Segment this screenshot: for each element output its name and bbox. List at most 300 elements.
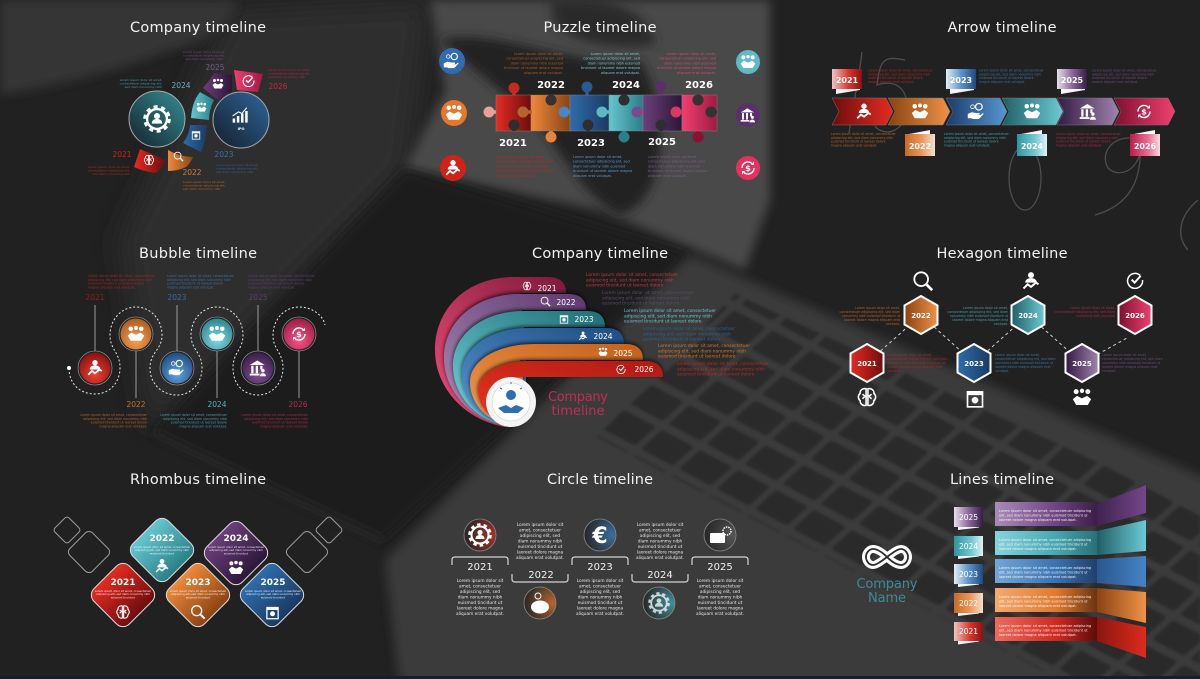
puzzle text blocks: Lorem ipsum dolor sit amet, [667, 52, 716, 56]
bar 2022: elit, sed diam nonummy nibh euismod tincidunt ut [999, 599, 1088, 603]
bar 2023: Lorem ipsum dolor sit amet, consectetuer adipiscing [999, 566, 1091, 570]
bubble text blocks: euismod tincidunt ut laoreet dolore [167, 282, 223, 286]
circle text blocks: diam nonummy nibh [638, 538, 683, 544]
bubble text blocks: magna aliquam erat volutpat. [99, 424, 147, 428]
hexagon text blocks: consectetuer adipiscing elit, sed diam [947, 310, 1008, 314]
tag 2024 [954, 536, 983, 559]
puzzle text blocks: diam nonummy nibh euismod [511, 61, 563, 65]
rhombus 2025: 2025 [260, 578, 286, 588]
icon: hand coin [439, 48, 465, 74]
rhombus 2021: adipiscing elit, sed diam nonummy nibh [96, 592, 150, 596]
puzzle text blocks: tincidunt ut laoreet dolore magna [573, 169, 632, 173]
text blocks: Lorem ipsum dolor sit amet, [88, 165, 130, 169]
tag 2023: 2023 [950, 76, 972, 85]
arrow text blocks: Lorem ipsum dolor sit amet, consectetuer [979, 68, 1045, 72]
hexagon text blocks: nonummy nibh euismod tincidunt ut [995, 361, 1054, 365]
bubble years: 2026 [288, 400, 308, 409]
bubble 2026 [282, 317, 316, 351]
puzzle piece 2023 [558, 82, 609, 131]
title: Circle timeline [547, 472, 653, 488]
segment 2025 [203, 73, 232, 100]
bubble text blocks: euismod tincidunt ut laoreet dolore [252, 421, 308, 425]
panel: arrow timeline [831, 20, 1175, 156]
tag 2023 [946, 69, 976, 94]
text blocks: consectetuer adipiscing elit, [268, 71, 310, 75]
bar 2025: elit, sed diam nonummy nibh euismod tincidunt ut [999, 513, 1088, 517]
infinity logo [866, 549, 908, 565]
bubble 2023 [160, 351, 194, 385]
company name: Company [856, 577, 918, 592]
arrow text blocks: adipiscing elit, sed diam nonummy nibh [944, 136, 1006, 140]
hexagon text blocks [839, 306, 1163, 373]
bubble years: 2021 [85, 293, 105, 302]
rhombus 2021 [88, 560, 158, 630]
puzzle years: 2024 [612, 80, 640, 91]
bar 2023 [995, 559, 1097, 583]
bar 2024: laoreet dolore magna aliquam erat volutpat. [999, 547, 1077, 551]
hexagon text blocks: Lorem ipsum dolor sit amet, [1102, 353, 1147, 357]
puzzle piece 2021 [484, 82, 531, 131]
circle text blocks: adipiscing elit, sed [640, 533, 680, 539]
circle text blocks: diam nonummy nibh [458, 594, 503, 600]
circle 2021 [464, 519, 496, 551]
hexagon text blocks: laoreet dolore magna aliquam erat [952, 318, 1009, 322]
hexagon text blocks: consectetuer adipiscing elit, sed diam [887, 357, 948, 361]
arrow text blocks: magna aliquam erat volutpat. [831, 143, 877, 147]
hexagon 2024: 2024 [1018, 312, 1038, 320]
circle years: 2022 [528, 570, 554, 581]
hexagon text blocks: laoreet dolore magna aliquam erat [887, 365, 943, 369]
bubble text blocks: magna aliquam erat volutpat. [167, 285, 215, 289]
rhombus 2025: adipiscing elit, sed diam nonummy nibh [246, 592, 300, 596]
arrow text blocks: euismod tincidunt ut laoreet dolore [1056, 140, 1111, 144]
circle 2023 [584, 519, 616, 551]
panel: rhombus timeline [53, 472, 343, 630]
circle text blocks: aliquam erat volutpat. [516, 555, 564, 561]
title: Puzzle timeline [544, 20, 657, 36]
hexagon text blocks: consectetuer adipiscing elit, sed diam [1102, 357, 1163, 361]
tag 2021: 2021 [959, 627, 978, 636]
rhombus 2024: Lorem ipsum dolor sit amet, consectetuer [208, 545, 265, 549]
tag 2026 [1130, 130, 1160, 156]
year labels [112, 63, 288, 177]
band text blocks: Lorem ipsum dolor sit amet, consectetuer [624, 308, 716, 314]
puzzle years: 2021 [499, 138, 527, 149]
rhombus 2022: 2022 [149, 534, 175, 544]
bubble text blocks: adipiscing elit, sed diam nonummy nibh [167, 278, 231, 282]
band text blocks: euismod tincidunt ut laoreet dolore [658, 354, 736, 360]
tag 2025 [1057, 69, 1087, 94]
puzzle text blocks: Lorem ipsum dolor sit amet, [648, 155, 697, 159]
circle text blocks: diam nonummy nibh [578, 594, 623, 600]
bubble text blocks [80, 274, 315, 428]
hexagon 2026 [1118, 296, 1152, 334]
puzzle text blocks: diam nonummy nibh euismod [496, 164, 548, 168]
bubble text blocks: Lorem ipsum dolor sit amet, consectetuer [248, 274, 315, 278]
year labels: 2026 [268, 82, 288, 91]
arrow text blocks [831, 68, 1158, 147]
band years: 2023 [574, 315, 594, 324]
segment 2021 [134, 149, 165, 173]
chevron 2024 [1002, 98, 1063, 125]
circle text blocks: euismod tincidunt ut [518, 544, 563, 550]
hexagon text blocks: Lorem ipsum dolor sit amet, [963, 306, 1008, 310]
tag 2025 [954, 507, 983, 530]
band years: 2021 [537, 284, 557, 293]
puzzle text blocks: consectetuer adipiscing elit, sed [506, 57, 563, 61]
band text blocks: adipiscing elit, sed diam nonummy nibh [643, 331, 731, 337]
circle 2023: € [591, 524, 608, 549]
band text blocks: Lorem ipsum dolor sit amet, consectetuer [643, 326, 735, 332]
label: Company timeline: timeline [552, 404, 604, 419]
title: Company timeline [130, 20, 266, 36]
year labels: 2023 [214, 150, 234, 159]
wing 2022 [1097, 588, 1146, 623]
puzzle text blocks: consectetuer adipiscing elit, sed [659, 57, 716, 61]
rhombus 2023: 2023 [185, 578, 211, 588]
bubble 2025 [241, 351, 275, 385]
puzzle years: 2026 [685, 80, 713, 91]
title: Bubble timeline [139, 246, 257, 262]
hexagon 2022: 2022 [911, 312, 931, 320]
chevron 2021 [832, 98, 893, 125]
arrow text blocks: magna aliquam erat volutpat. [944, 143, 990, 147]
tag 2023 [954, 564, 983, 587]
wing 2025 [1097, 485, 1146, 526]
rhombus 2024 [201, 518, 271, 588]
puzzle text blocks: tincidunt ut laoreet dolore magna [504, 66, 563, 70]
arrow text blocks: magna aliquam erat volutpat. [868, 80, 914, 84]
arrow text blocks: Lorem ipsum dolor sit amet, consectetuer [944, 132, 1010, 136]
bar 2025: Lorem ipsum dolor sit amet, consectetuer adipiscing [999, 509, 1091, 513]
arrow text blocks: Lorem ipsum dolor sit amet, consectetuer [868, 68, 934, 72]
band 2023 [453, 311, 605, 425]
puzzle text blocks: Lorem ipsum dolor sit amet, [573, 155, 622, 159]
bubble years: 2025 [248, 293, 268, 302]
hexagon 2024 [1012, 296, 1044, 334]
hexagon text blocks: volutpat. [995, 369, 1009, 373]
band years [537, 284, 654, 374]
text blocks: consectetuer adipiscing elit, [183, 53, 225, 57]
bubble text blocks: adipiscing elit, sed diam nonummy nibh [244, 417, 308, 421]
puzzle piece 2025 [632, 80, 682, 131]
hexagon text blocks: laoreet dolore magna aliquam erat [844, 318, 901, 322]
text blocks: Lorem ipsum dolor sit amet, [183, 50, 225, 54]
text blocks [88, 50, 310, 191]
arrow text blocks: euismod tincidunt ut laoreet dolore [944, 140, 999, 144]
segment 2026 [234, 70, 263, 92]
arrow text blocks: magna aliquam erat volutpat. [1092, 80, 1138, 84]
year labels: 2025 [205, 63, 225, 72]
puzzle text blocks: consectetuer adipiscing elit, sed [573, 160, 630, 164]
puzzle text blocks: Lorem ipsum dolor sit amet, [591, 52, 640, 56]
icon: bank [736, 103, 760, 127]
band text blocks: Lorem ipsum dolor sit amet, consectetuer [586, 272, 678, 278]
circle text blocks: laoreet dolore magna [637, 550, 683, 556]
wing 2023 [1097, 556, 1146, 587]
bar 2023: laoreet dolore magna aliquam erat volutpat. [999, 575, 1077, 579]
text blocks: Lorem ipsum dolor sit amet, [268, 68, 310, 72]
circle 2025 [704, 519, 736, 551]
circle text blocks: euismod tincidunt ut [458, 600, 503, 606]
tag 2023: 2023 [959, 570, 978, 579]
bubble 2021 [78, 351, 112, 385]
text blocks: Lorem ipsum dolor sit amet, [216, 163, 258, 167]
hexagon text blocks: Lorem ipsum dolor sit amet, [887, 353, 932, 357]
label: Company timeline: Company [548, 390, 608, 405]
hexagon 2023: 2023 [964, 360, 984, 368]
rhombus 2023: adipiscing elit, sed diam nonummy nibh [171, 592, 225, 596]
bubble text blocks: euismod tincidunt ut laoreet dolore [248, 282, 304, 286]
icon: team [441, 100, 467, 126]
puzzle text blocks [496, 52, 716, 178]
hexagon text blocks: consectetuer adipiscing elit, sed diam [1054, 310, 1115, 314]
band text blocks: euismod tincidunt ut laoreet dolore [624, 319, 702, 325]
band years: 2026 [634, 365, 654, 374]
segment 2023 [183, 125, 207, 152]
panel: hexagon timeline [839, 246, 1163, 407]
arrow text blocks: adipiscing elit, sed diam nonummy nibh [868, 72, 930, 76]
band 2024 [462, 328, 624, 424]
tag 2025: 2025 [959, 513, 978, 522]
circle text blocks: Lorem ipsum dolor sit [637, 522, 684, 528]
bar 2021: elit, sed diam nonummy nibh euismod tincidunt ut [999, 628, 1088, 632]
circle years: 2025 [707, 562, 733, 573]
title: Company timeline [532, 246, 668, 262]
bubble text blocks: magna aliquam erat volutpat. [260, 424, 308, 428]
circle years: 2021 [467, 562, 493, 573]
bar 2025: laoreet dolore magna aliquam erat volutpat. [999, 518, 1077, 522]
tag 2021: 2021 [836, 76, 859, 85]
wing 2024 [1097, 520, 1146, 555]
dashed connectors [867, 315, 1127, 363]
company name: Name [868, 591, 906, 606]
hexagon text blocks: nonummy nibh euismod tincidunt ut [1102, 361, 1161, 365]
puzzle years [499, 80, 713, 149]
hexagon text blocks: nonummy nibh euismod tincidunt ut [842, 314, 901, 318]
connectors [95, 305, 299, 398]
puzzle text blocks: Lorem ipsum dolor sit amet, [496, 155, 545, 159]
band text blocks: Lorem ipsum dolor sit amet, consectetuer [677, 361, 769, 367]
text blocks: consectetuer adipiscing elit, [88, 168, 130, 172]
outline diamonds [53, 516, 343, 575]
band 2022 [444, 294, 586, 426]
rhombus 2025: Lorem ipsum dolor sit amet, consectetuer [245, 589, 302, 593]
bubble text blocks: magna aliquam erat volutpat. [179, 424, 227, 428]
dotted path [69, 307, 325, 395]
icon: dollar [736, 156, 760, 180]
band 2026 [478, 361, 663, 422]
hexagon text blocks: nonummy nibh euismod [1076, 314, 1115, 318]
hexagon 2025: 2025 [1072, 360, 1092, 368]
circle text blocks: adipiscing elit, sed [520, 533, 560, 539]
text blocks: sed diam nonummy nibh [216, 170, 253, 174]
arrow text blocks: Lorem ipsum dolor sit amet, consectetuer [1092, 68, 1158, 72]
bar 2024: Lorem ipsum dolor sit amet, consectetuer adipiscing [999, 538, 1091, 542]
puzzle text blocks: diam nonummy nibh euismod [573, 164, 625, 168]
circle text blocks: Lorem ipsum dolor sit [457, 578, 504, 584]
rhombus 2023 [163, 560, 233, 630]
circle text blocks: euismod tincidunt ut [638, 544, 683, 550]
company name [856, 577, 918, 606]
circle text blocks: Lorem ipsum dolor sit [517, 522, 564, 528]
text blocks: sed diam nonummy nibh [125, 85, 162, 89]
circle text blocks: amet, consectetuer [579, 584, 621, 590]
bubble years: 2023 [167, 293, 187, 302]
circle text blocks: euismod tincidunt ut [578, 600, 623, 606]
bar 2021: Lorem ipsum dolor sit amet, consectetuer adipiscing [999, 624, 1091, 628]
text blocks: Lorem ipsum dolor sit amet, [183, 180, 225, 184]
tag 2022 [954, 593, 983, 616]
arrow text blocks: Lorem ipsum dolor sit amet, consectetuer [831, 132, 897, 136]
arrow text blocks: euismod tincidunt ut laoreet dolore [868, 76, 923, 80]
panel: puzzle timeline [439, 20, 760, 181]
panel: bubble timeline [67, 246, 325, 428]
hexagon icons [858, 272, 1143, 407]
band years: 2024 [593, 332, 613, 341]
panel: company timeline bands [435, 246, 769, 427]
circle text blocks: adipiscing elit, sed [460, 589, 500, 595]
puzzle text blocks: aliquam erat volutpat. [496, 174, 535, 178]
band text blocks: euismod tincidunt ut laoreet dolore [602, 301, 680, 307]
circle text blocks: Lorem ipsum dolor sit [697, 578, 744, 584]
arrow text blocks: euismod tincidunt ut laoreet dolore [979, 76, 1034, 80]
circle text blocks: aliquam erat volutpat. [576, 611, 624, 617]
puzzle text blocks: aliquam erat volutpat. [677, 71, 716, 75]
arrow text blocks: magna aliquam erat volutpat. [979, 80, 1025, 84]
segment 2022 [168, 150, 193, 171]
band text blocks: Lorem ipsum dolor sit amet, consectetuer [602, 290, 694, 296]
rhombus 2021: 2021 [110, 578, 136, 588]
wing 2021 [1097, 617, 1146, 658]
hexagon text blocks: volutpat. [1102, 369, 1116, 373]
puzzle text blocks: diam nonummy nibh euismod [648, 164, 700, 168]
puzzle years: 2023 [577, 138, 605, 149]
text blocks: sed diam nonummy nibh [185, 57, 223, 61]
bubble 2022 [119, 317, 153, 351]
puzzle text blocks: diam nonummy nibh euismod [664, 61, 716, 65]
bar 2024: elit, sed diam nonummy nibh euismod tincidunt ut [999, 542, 1088, 546]
circle text blocks: euismod tincidunt ut [698, 600, 743, 606]
puzzle text blocks: aliquam erat volutpat. [648, 174, 687, 178]
circle text blocks: aliquam erat volutpat. [696, 611, 744, 617]
puzzle text blocks: aliquam erat volutpat. [573, 174, 612, 178]
bar 2025 [995, 502, 1097, 526]
bubble text blocks: Lorem ipsum dolor sit amet, consectetuer [80, 413, 148, 417]
circle text blocks: laoreet dolore magna [517, 550, 563, 556]
circle text blocks: amet, consectetuer [459, 584, 501, 590]
tag 2024 [1017, 130, 1047, 156]
rhombus 2021: euismod tincidunt [111, 595, 135, 599]
bubble years: 2022 [126, 400, 146, 409]
rhombus 2024: adipiscing elit, sed diam nonummy nibh [209, 548, 263, 552]
panel: lines timeline [856, 472, 1146, 658]
arrow text blocks: magna aliquam erat volutpat. [1056, 143, 1102, 147]
circle years: 2023 [587, 562, 613, 573]
puzzle years: 2025 [648, 137, 676, 148]
rhombus 2025 [237, 560, 307, 630]
panel: company timeline circular [88, 20, 310, 191]
rhombus 2025: euismod tincidunt [261, 595, 285, 599]
hexagon text blocks: volutpat. [994, 322, 1008, 326]
puzzle text blocks: consectetuer adipiscing elit, sed [496, 160, 553, 164]
bubble text blocks: magna aliquam erat volutpat. [88, 285, 136, 289]
rhombus 2021: Lorem ipsum dolor sit amet, consectetuer [95, 589, 152, 593]
title: Rhombus timeline [130, 472, 266, 488]
bubble text blocks: Lorem ipsum dolor sit amet, consectetuer [241, 413, 309, 417]
puzzle text blocks: Lorem ipsum dolor sit amet, [514, 52, 563, 56]
text blocks: consectetuer adipiscing elit, [183, 183, 225, 187]
text blocks: sed diam nonummy nibh [93, 172, 130, 176]
text blocks: consectetuer adipiscing elit, [120, 81, 162, 85]
band text blocks: adipiscing elit, sed diam nonummy nibh [677, 366, 765, 372]
circle years: 2024 [647, 570, 673, 581]
bubble text blocks: adipiscing elit, sed diam nonummy nibh [88, 278, 152, 282]
icon: reader [736, 50, 760, 74]
puzzle text blocks: aliquam erat volutpat. [524, 71, 563, 75]
chevron 2022 [888, 98, 950, 125]
puzzle piece 2024 [596, 94, 643, 142]
circle text blocks: amet, consectetuer [519, 528, 561, 534]
bubble text blocks: euismod tincidunt ut laoreet dolore [91, 421, 147, 425]
rhombus 2023: euismod tincidunt [186, 595, 210, 599]
bubble 2024 [200, 317, 234, 351]
text blocks: sed diam nonummy nibh [268, 75, 305, 79]
puzzle text blocks: tincidunt ut laoreet dolore magna [657, 66, 716, 70]
title: Arrow timeline [948, 20, 1057, 36]
circle text blocks [456, 522, 744, 617]
hexagon 2025 [1066, 344, 1098, 382]
hexagon 2021: 2021 [857, 360, 877, 368]
bubble text blocks: euismod tincidunt ut laoreet dolore [88, 282, 144, 286]
bar 2021 [995, 617, 1097, 641]
hexagon text blocks: Lorem ipsum dolor sit amet, [995, 353, 1040, 357]
band 2021 [435, 277, 566, 427]
hexagon text blocks: Lorem ipsum dolor sit amet, [855, 306, 900, 310]
text blocks: Lorem ipsum dolor sit amet, [120, 78, 162, 82]
circle text blocks: adipiscing elit, sed [700, 589, 740, 595]
band text blocks [586, 272, 769, 378]
circle text blocks: laoreet dolore magna [457, 606, 503, 612]
text blocks: consectetuer adipiscing elit, [216, 166, 258, 170]
hexagon text blocks: volutpat. [886, 322, 900, 326]
tag 2022: 2022 [909, 142, 931, 151]
panel: circle timeline [452, 472, 748, 619]
logo disc [486, 377, 536, 427]
chevron 2023 [946, 98, 1007, 125]
circle text blocks: aliquam erat volutpat. [456, 611, 504, 617]
big circle: IPO [213, 92, 269, 148]
bubble years [85, 293, 308, 409]
year labels: 2024 [171, 81, 191, 90]
bubble years: 2024 [207, 400, 227, 409]
puzzle text blocks: tincidunt ut laoreet dolore magna [648, 169, 707, 173]
puzzle text blocks: diam nonummy nibh euismod [588, 61, 640, 65]
bubble text blocks: euismod tincidunt ut laoreet dolore [171, 421, 227, 425]
start dot [67, 366, 71, 370]
year labels: 2022 [182, 168, 202, 177]
hexagon text blocks: laoreet dolore magna aliquam erat [995, 365, 1051, 369]
hexagon text blocks: Lorem ipsum dolor sit amet, [1070, 306, 1115, 310]
rhombus 2022 [127, 515, 197, 585]
band text blocks: euismod tincidunt ut laoreet dolore [643, 337, 721, 343]
band years: 2025 [613, 349, 633, 358]
tag 2025: 2025 [1061, 76, 1084, 85]
puzzle text blocks: aliquam erat volutpat. [601, 71, 640, 75]
rhombus 2022: euismod tincidunt [150, 551, 174, 555]
circle 2022 [524, 587, 556, 619]
circle 2024 [643, 587, 675, 619]
